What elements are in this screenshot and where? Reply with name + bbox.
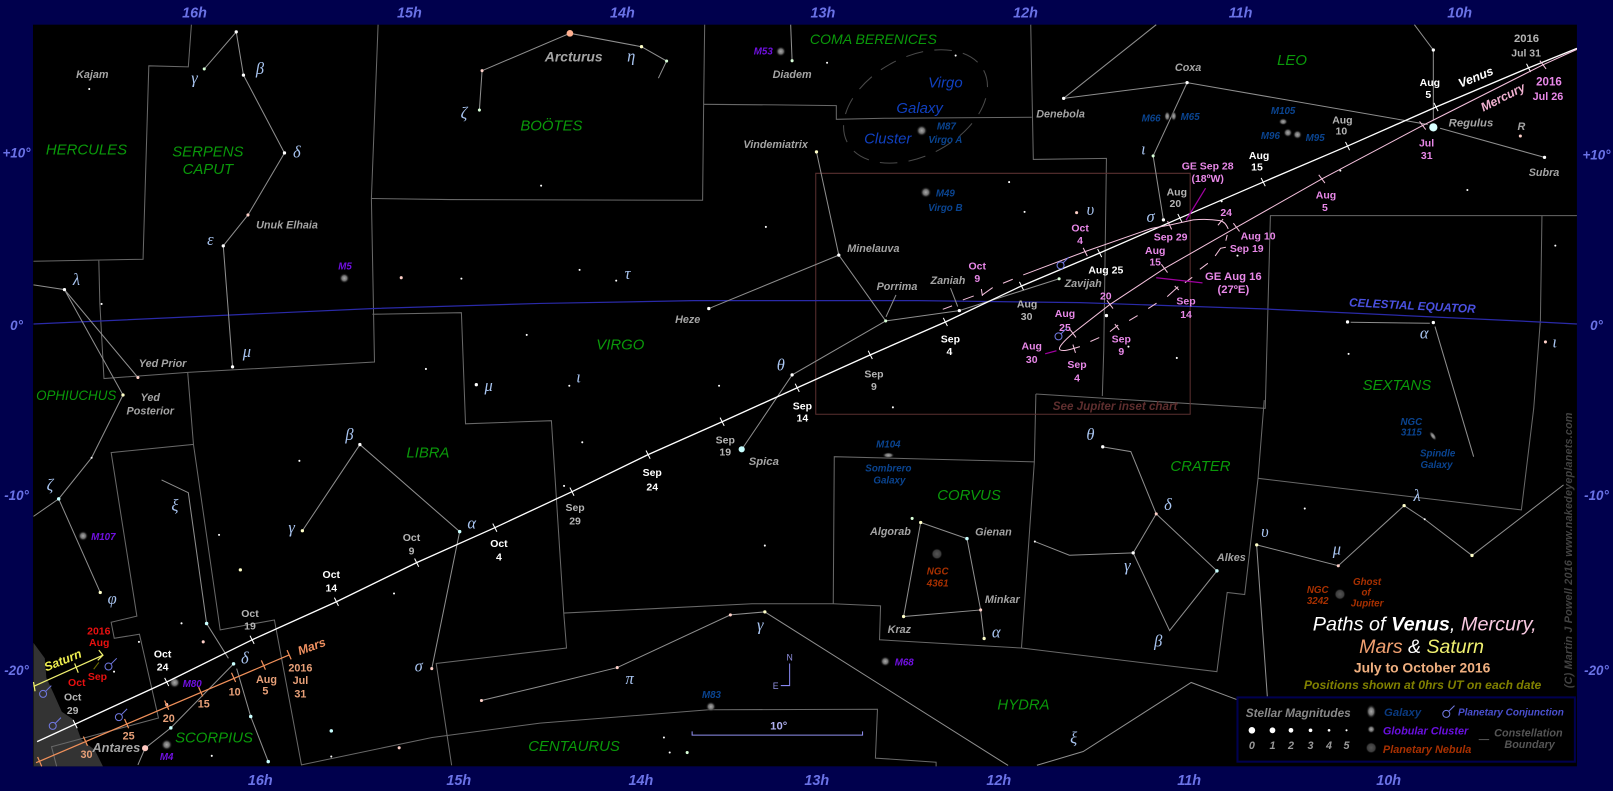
Mercury dates: Aug 10 (1241, 232, 1276, 243)
Mercury dates: 25 (1059, 323, 1071, 334)
deep sky labels: M105 (1271, 106, 1296, 117)
star names: Arcturus (544, 49, 603, 65)
Mercury dates: 20 (1100, 291, 1112, 302)
Greek letters: τ (625, 264, 632, 283)
Venus dates: Sep (941, 335, 960, 346)
deep sky labels: M80 (183, 679, 202, 690)
constellation names: HYDRA (997, 698, 1050, 714)
title: Paths of Venus, Mercury, (1313, 614, 1537, 636)
star names: Posterior (127, 406, 175, 418)
Venus dates: Aug 25 (1088, 266, 1123, 277)
star names: Heze (675, 314, 700, 326)
right ascension labels, top: 10h (1447, 5, 1472, 21)
star names: Yed Prior (139, 358, 187, 370)
right ascension labels, bottom: 15h (446, 773, 471, 789)
Venus dates: Sep (864, 369, 884, 380)
Mars dates (80, 663, 312, 761)
planetary conjunction symbols (40, 257, 1069, 729)
Venus dates: 24 (157, 663, 169, 674)
Venus dates: Oct (403, 533, 421, 544)
Mercury dates: Oct (969, 261, 986, 272)
star names: Minkar (985, 594, 1021, 606)
Greek letters: δ (1164, 495, 1172, 514)
declination labels, right: 0° (1590, 318, 1604, 333)
Mercury path (943, 49, 1577, 353)
right ascension labels, bottom: 16h (248, 773, 273, 789)
right ascension labels, top: 12h (1013, 5, 1038, 21)
declination labels, left: -10° (4, 488, 30, 503)
compass: N (786, 652, 793, 662)
Mercury dates: 15 (1149, 257, 1161, 268)
Venus dates: Aug (1420, 78, 1440, 89)
deep sky key: Galaxy (1384, 707, 1422, 719)
Venus dates: Oct (490, 539, 508, 550)
constellation names: CRATER (1170, 459, 1231, 475)
right ascension labels, bottom: 13h (804, 773, 829, 789)
deep sky labels: M65 (1181, 112, 1200, 123)
deep sky labels: M49 (936, 188, 955, 199)
stellar magnitudes key: 5 (1344, 740, 1351, 752)
Venus dates: 19 (244, 622, 256, 633)
constellation names: HERCULES (46, 142, 127, 158)
deep sky labels: M104 (876, 439, 901, 450)
Saturn dates: 2016 (87, 627, 111, 638)
Mercury dates: 5 (1322, 203, 1328, 214)
Venus dates: Oct (64, 692, 82, 703)
Mercury dates: 9 (1118, 347, 1124, 358)
Saturn dates: Sep (88, 672, 107, 683)
star names: Subra (1529, 167, 1559, 179)
Greek letters: υ (1087, 200, 1095, 219)
Greek letters: α (1420, 323, 1429, 342)
deep sky labels: Galaxy (1420, 460, 1453, 471)
deep sky labels: NGC (1307, 585, 1330, 596)
constellation names: SEXTANS (1363, 378, 1431, 394)
Venus dates: 24 (646, 483, 658, 494)
Mercury dates: Aug (1316, 191, 1336, 202)
star names: Gienan (975, 526, 1012, 538)
Greek letters: α (992, 623, 1001, 642)
deep sky labels: Ghost (1353, 577, 1382, 588)
Mercury dates: GE Sep 28 (1182, 162, 1234, 173)
Virgo galaxy cluster outline (824, 27, 1007, 186)
Venus dates: Oct (323, 570, 341, 581)
Greek letters: υ (1261, 522, 1269, 541)
Greek letters: θ (1086, 425, 1094, 444)
star names: Antares (91, 740, 140, 755)
constellation names: BOÖTES (520, 117, 583, 135)
Greek letters: β (1153, 631, 1163, 650)
compass: E (773, 681, 779, 691)
deep sky labels: M66 (1142, 113, 1161, 124)
stellar magnitudes key: Stellar Magnitudes (1246, 706, 1351, 720)
Venus dates: Oct (241, 609, 259, 620)
constellation names: COMA BERENICES (810, 31, 937, 47)
Venus dates: 2016 (1514, 33, 1539, 45)
deep sky labels: M87 (937, 122, 956, 133)
Virgo galaxy cluster outline: Cluster (864, 131, 912, 147)
Greek letters: β (344, 425, 354, 444)
Mercury dates: Jul 26 (1533, 91, 1563, 103)
declination labels, right: -20° (1584, 663, 1609, 678)
Venus dates: 5 (1425, 90, 1431, 101)
star names: Coxa (1175, 62, 1201, 74)
deep sky labels: M95 (1306, 133, 1325, 144)
Venus dates: 14 (797, 414, 808, 425)
Venus dates: 20 (1170, 199, 1181, 210)
Mars label: Mars (296, 635, 328, 658)
constellation names: OPHIUCHUS (36, 388, 116, 403)
Venus dates: 15 (1251, 163, 1263, 174)
Saturn dates: Oct (68, 678, 86, 689)
Mercury label: Mercury (1478, 80, 1528, 114)
star names: Yed (141, 392, 160, 404)
Greek letters: λ (72, 270, 80, 289)
declination labels, right: +10° (1582, 147, 1611, 162)
Mercury dates: 24 (1220, 208, 1232, 219)
deep sky labels: M53 (754, 47, 773, 58)
title: Mars & Saturn (1359, 636, 1484, 658)
deep sky labels: Spindle (1420, 449, 1456, 460)
Mercury dates: (18ºW) (1191, 174, 1224, 185)
right ascension labels, bottom: 11h (1177, 773, 1201, 789)
stellar magnitudes key (1246, 706, 1351, 752)
celestial equator (34, 301, 1577, 324)
scale bar: 10° (770, 720, 788, 732)
deep sky key: Planetary Nebula (1383, 744, 1471, 756)
deep sky labels: NGC (1400, 417, 1423, 428)
Mars dates: Jul (293, 675, 308, 687)
right ascension labels, top: 13h (811, 5, 836, 21)
Greek letters: ζ (461, 103, 469, 122)
Venus dates: Jul 31 (1511, 49, 1541, 60)
Greek letters: ζ (47, 476, 55, 495)
star names: R (1517, 121, 1525, 133)
deep sky key (1366, 704, 1471, 756)
Greek letters: σ (1147, 207, 1156, 226)
Venus dates: 30 (1021, 312, 1033, 323)
Mercury dates: Sep (1067, 360, 1087, 371)
Venus dates: 29 (67, 706, 79, 717)
Mercury dates: 4 (1074, 374, 1080, 385)
Greek letters: μ (484, 376, 493, 395)
Mercury dates: Sep (1176, 296, 1196, 307)
Greek letters: γ (288, 518, 295, 537)
Mars dates: 30 (80, 749, 92, 761)
deep sky labels: NGC (927, 566, 949, 577)
Mercury dates: 31 (1421, 151, 1433, 162)
Mars dates: 10 (229, 686, 241, 698)
Venus dates: Aug (1332, 115, 1353, 126)
Greek letters: ι (1141, 139, 1146, 158)
stellar magnitudes key: 4 (1325, 740, 1332, 752)
Greek letters: ι (576, 368, 581, 387)
Mars dates: 2016 (288, 663, 312, 675)
Jupiter inset chart frame (816, 173, 1190, 414)
right ascension labels, top: 11h (1229, 5, 1253, 21)
declination labels, left: 0° (10, 318, 24, 333)
deep sky labels: M96 (1261, 131, 1280, 142)
declination labels, right (1582, 147, 1611, 678)
Greek letters: ξ (171, 496, 179, 515)
Greek letters: δ (293, 142, 301, 161)
Mercury dates: Aug (1022, 342, 1042, 353)
Greek letters: μ (1332, 539, 1341, 558)
Mars dates: Aug (256, 674, 277, 686)
declination labels, left: -20° (4, 663, 30, 678)
deep sky labels: 3115 (1401, 428, 1422, 439)
star names: Minelauva (847, 243, 899, 255)
stellar magnitudes key: 1 (1269, 740, 1275, 752)
Mercury dates: Jul (1419, 139, 1434, 150)
Mercury dates: 2016 (1536, 76, 1562, 88)
star names: Alkes (1216, 552, 1246, 564)
deep sky labels: M4 (160, 752, 174, 763)
planetary conjunction key: Planetary Conjunction (1458, 707, 1564, 718)
right ascension labels, top (182, 5, 1472, 21)
constellation names: CENTAURUS (528, 739, 620, 755)
copyright: (C) Martin J Powell 2016 www.nakedeyeplanets.com (1563, 412, 1575, 688)
Venus dates: Aug (1249, 151, 1269, 162)
deep sky labels: Virgo A (928, 135, 962, 146)
Mars dates: 5 (262, 685, 268, 697)
Mercury dates: 9 (974, 274, 980, 285)
Greek letters: β (255, 59, 265, 78)
scale bar (692, 720, 863, 735)
Venus dates: Aug (1017, 300, 1037, 311)
Greek letters: λ (1413, 486, 1421, 505)
Greek letters: σ (415, 657, 424, 676)
constellation names (36, 31, 1431, 755)
constellation boundary key (1479, 727, 1563, 751)
Greek letters: γ (757, 616, 764, 635)
Mercury dates: Sep (1112, 335, 1131, 346)
Venus dates: 10 (1336, 127, 1347, 138)
Virgo galaxy cluster outline: Virgo (928, 75, 963, 91)
Venus dates: 14 (325, 583, 337, 594)
title (1304, 614, 1542, 692)
star names: Spica (749, 456, 779, 468)
stellar magnitudes key: 2 (1287, 740, 1294, 752)
Greek letters: α (467, 514, 476, 533)
celestial equator label: CELESTIAL EQUATOR (1349, 295, 1476, 316)
declination labels, left (3, 145, 31, 678)
compass (773, 652, 793, 691)
Mercury dates: 4 (1077, 236, 1083, 247)
constellation names: LEO (1277, 53, 1307, 69)
Venus dates: 9 (871, 382, 877, 393)
star names: Zaniah (930, 275, 966, 287)
star names: Algorab (869, 526, 911, 538)
constellation names: VIRGO (596, 338, 645, 354)
Greek letters: δ (241, 648, 249, 667)
right ascension labels, bottom (248, 773, 1401, 789)
Venus dates: 29 (569, 517, 581, 528)
deep sky labels: Jupiter (1351, 598, 1385, 609)
Saturn dates: Aug (89, 638, 109, 649)
Venus dates: Aug (1167, 187, 1187, 198)
Venus dates: 19 (719, 448, 731, 459)
constellation names: CORVUS (937, 488, 1001, 504)
Greek letters: η (627, 47, 635, 66)
Mars path (36, 650, 291, 766)
Virgo galaxy cluster outline: Galaxy (896, 101, 944, 117)
Greek letters: ξ (1070, 729, 1078, 748)
Mercury dates: 30 (1026, 355, 1038, 366)
Mars dates: 15 (198, 699, 210, 711)
stellar magnitudes key: 0 (1249, 740, 1255, 752)
Venus dates: 9 (409, 546, 415, 557)
constellation names: SCORPIUS (175, 731, 253, 747)
constellation boundary key: Constellation (1494, 727, 1563, 739)
Greek letters: μ (242, 342, 251, 361)
Mercury dates: Sep 19 (1230, 244, 1264, 255)
Saturn label: Saturn (42, 646, 84, 674)
Greek letters: θ (777, 355, 785, 374)
deep sky labels (91, 47, 1456, 763)
deep sky labels: M68 (895, 658, 914, 669)
Venus dates: Oct (154, 649, 172, 660)
Greek letters: φ (108, 589, 117, 608)
Mercury dates: Sep 29 (1154, 233, 1188, 244)
constellation names: LIBRA (406, 446, 450, 462)
deep sky labels: M83 (702, 690, 722, 701)
deep sky labels: M107 (91, 532, 116, 543)
star names: Kraz (888, 624, 912, 636)
right ascension labels, top: 16h (182, 5, 207, 21)
deep sky labels: 3242 (1307, 596, 1329, 607)
Venus dates: Sep (716, 435, 735, 446)
legend (1237, 697, 1575, 762)
deep sky labels: Virgo B (928, 203, 963, 214)
Mercury dates: 14 (1180, 310, 1192, 321)
star names: Denebola (1036, 108, 1085, 120)
Mercury greatest elongation markers (1045, 188, 1206, 354)
star names: Regulus (1449, 118, 1493, 130)
Greek letters: γ (1124, 556, 1131, 575)
star names: Zavijah (1064, 278, 1102, 290)
Venus dates: 4 (947, 347, 953, 358)
Saturn dates (68, 627, 111, 689)
Greek letters: γ (191, 68, 198, 87)
star names: Porrima (877, 281, 917, 293)
Venus label: Venus (1456, 64, 1496, 91)
Venus dates: Sep (565, 503, 585, 514)
deep sky key: Globular Cluster (1383, 725, 1469, 737)
title: Positions shown at 0hrs UT on each date (1304, 678, 1542, 692)
constellation boundary key: Boundary (1504, 739, 1556, 751)
star names: Diadem (773, 69, 812, 81)
constellation names: CAPUT (183, 162, 234, 178)
right ascension labels, bottom: 10h (1376, 773, 1401, 789)
right ascension labels, bottom: 12h (986, 773, 1011, 789)
Venus dates: 4 (496, 553, 502, 564)
deep sky labels: Sombrero (865, 464, 911, 475)
Venus dates: Sep (793, 401, 812, 412)
declination labels, right: -10° (1584, 488, 1609, 503)
Mercury dates: (27ºE) (1217, 284, 1249, 296)
Mars dates: 25 (123, 731, 135, 743)
Venus dates: Sep (643, 468, 662, 479)
right ascension labels, top: 14h (610, 5, 635, 21)
constellation names: SERPENS (172, 144, 244, 160)
Venus dates (64, 33, 1541, 717)
deep sky labels: M5 (338, 261, 352, 272)
right ascension labels, bottom: 14h (628, 773, 653, 789)
Greek letters: π (625, 669, 634, 688)
right ascension labels, top: 15h (397, 5, 422, 21)
Mars dates: 31 (294, 688, 306, 700)
deep sky labels: Galaxy (873, 475, 906, 486)
deep sky objects (78, 46, 1438, 750)
Mercury dates: Oct (1071, 223, 1089, 234)
Mercury dates: GE Aug 16 (1205, 271, 1262, 283)
title: July to October 2016 (1354, 660, 1491, 676)
Mars dates: 20 (163, 713, 175, 725)
Mercury dates: Aug (1145, 246, 1165, 257)
declination labels, left: +10° (3, 145, 31, 160)
star names: Kajam (76, 69, 109, 81)
star names: Unuk Elhaia (256, 219, 318, 231)
deep sky labels: of (1361, 588, 1372, 599)
milky way patch (34, 643, 103, 766)
star names: Vindemiatrix (743, 139, 809, 151)
Mercury dates: Aug (1055, 309, 1075, 320)
Greek letters: ε (207, 230, 214, 249)
Jupiter inset note: See Jupiter inset chart (1053, 400, 1178, 413)
Saturn path (34, 650, 103, 691)
deep sky labels: 4361 (926, 578, 949, 589)
stellar magnitudes key: 3 (1308, 740, 1314, 752)
Greek letters: ι (1552, 333, 1557, 352)
Mercury dates (969, 76, 1563, 385)
